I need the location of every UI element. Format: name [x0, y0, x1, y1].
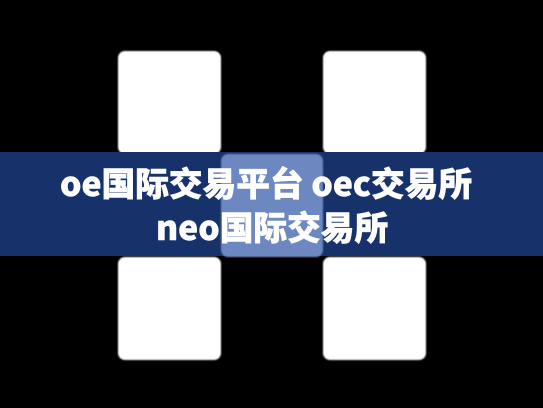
- icon tile: top right: [323, 51, 426, 154]
- center tile: [221, 154, 323, 257]
- title line 2: neo国际交易所: [156, 201, 388, 250]
- title line 1: oe国际交易平台 oec交易所: [60, 157, 472, 206]
- icon tile: top left: [118, 51, 221, 154]
- icon tile: bottom right: [323, 257, 426, 360]
- icon tile: bottom left: [118, 257, 221, 360]
- title band: [0, 152, 543, 256]
